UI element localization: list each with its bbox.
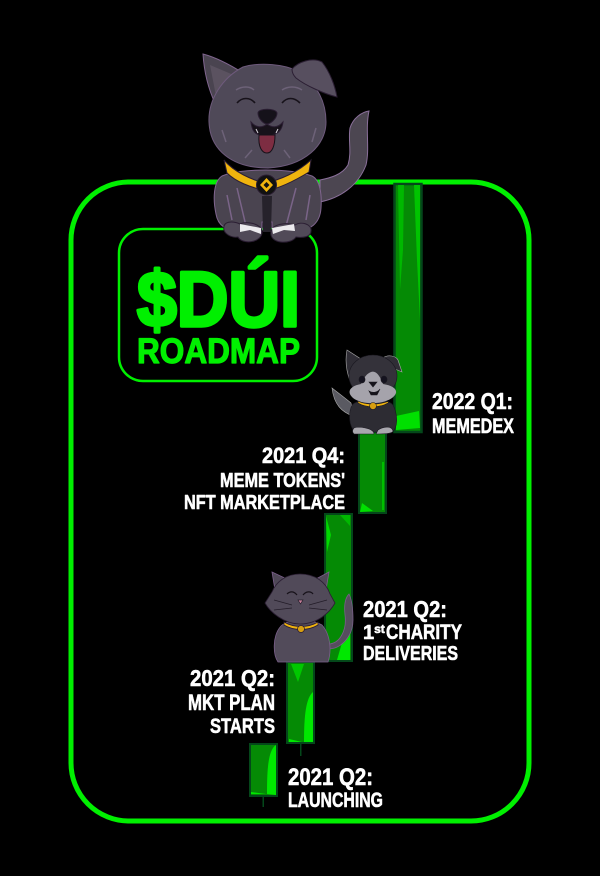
icon: small husky dog mascot <box>332 350 402 434</box>
husky face <box>350 372 396 403</box>
outer roadmap frame <box>71 182 529 821</box>
cat collar <box>284 622 318 630</box>
dog left ear <box>203 54 243 103</box>
cat ears <box>272 572 329 596</box>
dog eyes <box>237 98 300 103</box>
husky tail <box>332 388 353 416</box>
label: 2021 Q2 first charity deliveries: DELIVERIES <box>363 643 458 665</box>
husky body <box>350 400 397 432</box>
cat head <box>265 574 335 624</box>
cat tail <box>326 594 353 649</box>
label: 2021 Q2 launching: LAUNCHING <box>288 789 383 812</box>
cat eyes <box>287 592 313 595</box>
dog collar <box>224 160 311 191</box>
dog fur highlights <box>222 87 316 158</box>
heading: ROADMAP: ROADMAP <box>137 332 300 371</box>
dog mouth <box>251 122 283 135</box>
candlestick: 2021 Q2 marketing plan <box>287 662 314 756</box>
husky paws <box>352 427 393 434</box>
label: 2021 Q4 meme tokens NFT marketplace: 2021 Q4: <box>262 443 345 468</box>
label: 2021 Q4 meme tokens NFT marketplace: NFT MARKETPLACE <box>184 492 345 514</box>
dog head <box>209 64 326 168</box>
dog collar badge <box>256 175 276 195</box>
dog nose <box>258 109 277 124</box>
husky head <box>349 355 397 397</box>
label: 2021 Q2 launching <box>288 764 383 812</box>
label: 2021 Q2 first charity deliveries <box>363 596 462 665</box>
heading: $DÚI: $DÚI <box>137 255 300 343</box>
icon: grey cat mascot <box>265 572 353 662</box>
label: 2021 Q2 first charity deliveries: CHARITY <box>386 621 462 644</box>
label: 2022 Q1 Memedex: MEMEDEX <box>432 415 514 438</box>
label: 2021 Q4 meme tokens NFT marketplace <box>184 443 345 514</box>
label: 2022 Q1 Memedex <box>432 388 514 438</box>
dog right ear <box>292 60 337 97</box>
label: 2021 Q2 first charity deliveries: st <box>374 622 385 636</box>
dog tail <box>320 111 369 202</box>
candlestick: 2021 Q2 charity deliveries <box>325 514 352 661</box>
label: 2021 Q2 first charity deliveries: 2021 Q2: <box>363 596 447 622</box>
label: 2021 Q2 marketing plan starts: 2021 Q2: <box>190 665 275 691</box>
dog paws <box>224 222 262 242</box>
husky ears <box>346 350 402 381</box>
candlestick: 2021 Q2 launching <box>250 744 277 807</box>
label: 2022 Q1 Memedex: 2022 Q1: <box>432 388 513 414</box>
husky nose and mouth <box>369 382 380 395</box>
label: 2021 Q2 launching: 2021 Q2: <box>288 764 373 791</box>
candlestick: 2021 Q4 NFT marketplace <box>359 432 386 513</box>
husky collar <box>358 401 389 407</box>
cat body <box>274 620 330 662</box>
cat nose and whiskers <box>274 600 327 610</box>
label: 2021 Q2 first charity deliveries: 1 <box>363 622 374 644</box>
label: 2021 Q4 meme tokens NFT marketplace: MEME TOKENS' <box>220 470 345 492</box>
label: 2021 Q2 marketing plan starts: MKT PLAN <box>188 690 275 715</box>
dog tongue <box>259 135 275 153</box>
label: 2021 Q2 marketing plan starts <box>188 665 275 738</box>
dog body and legs <box>214 170 321 232</box>
icon: large grey dog mascot <box>203 54 369 242</box>
panel: title box <box>119 229 317 381</box>
candlestick: 2022 Q1 Memedex <box>394 184 422 432</box>
husky eyes <box>359 376 387 383</box>
label: 2021 Q2 marketing plan starts: STARTS <box>210 715 275 738</box>
